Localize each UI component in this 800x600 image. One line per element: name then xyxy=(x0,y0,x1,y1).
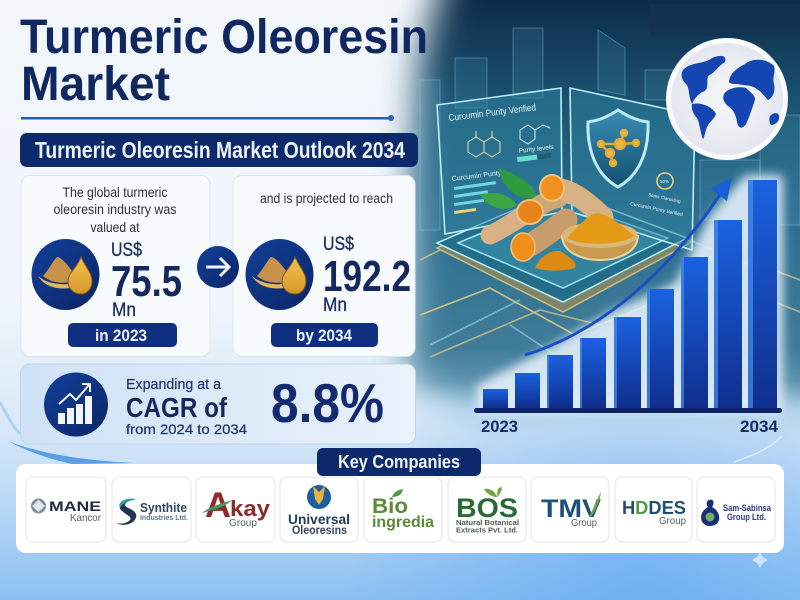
logo: Akay Group: Group xyxy=(229,518,257,529)
panel: key companies xyxy=(16,464,784,553)
title: Turmeric Oleoresin xyxy=(20,11,428,64)
value 8.8%: 8.8% xyxy=(271,372,384,434)
icon: green leaves xyxy=(480,168,537,209)
icon: sparkle xyxy=(752,552,768,568)
arrow: growth trend xyxy=(525,177,732,355)
year badge: in 2023 xyxy=(95,326,147,345)
logo: BOS: Extracts Pvt. Ltd. xyxy=(456,526,518,534)
company logo cards xyxy=(26,477,775,542)
logo: HDDES Group: HDDES xyxy=(622,498,686,518)
logo: Sam-Sabinsa: Sam-Sabinsa xyxy=(723,503,772,514)
icon: powder and oil drop xyxy=(32,239,100,310)
icon: turmeric powder bowl xyxy=(535,213,638,271)
panel progress bars xyxy=(454,153,551,214)
logo: Synthite xyxy=(116,499,188,525)
panel heading: Curcumin Purity Verified xyxy=(448,102,537,124)
logo: TMV Group xyxy=(541,492,601,529)
logo: Universal Oleoresins: Oleoresins xyxy=(292,525,347,537)
unit: Mn xyxy=(323,295,347,316)
icon: growth chart xyxy=(44,372,108,436)
decorative city skyline xyxy=(420,28,800,230)
currency label: US$ xyxy=(323,234,354,255)
panel: value in 2023 xyxy=(21,176,210,356)
logo: BOS: Natural Botanical xyxy=(456,518,519,527)
currency label: US$ xyxy=(111,240,142,261)
logo: Sam-Sabinsa: Group Ltd. xyxy=(727,512,766,523)
CAGR text: CAGR of xyxy=(126,392,228,423)
panel: value by 2034 xyxy=(233,176,415,356)
CAGR text xyxy=(126,376,247,437)
CAGR text: Expanding at a xyxy=(126,376,222,393)
logo: Synthite: Synthite xyxy=(140,500,187,515)
logo: Universal Oleoresins: Universal xyxy=(288,511,350,527)
icon: turmeric rhizomes xyxy=(490,175,603,261)
icon: shield with molecule xyxy=(588,110,648,187)
description text: valued at xyxy=(90,220,140,235)
holographic panel: verification: Curcumin Purity Verified xyxy=(630,201,684,218)
heading badge: key companies xyxy=(317,448,481,476)
description text: and is projected to reach xyxy=(260,191,393,206)
logo: Sam-Sabinsa xyxy=(701,500,772,526)
holographic panel: verification: Sams Clarusting xyxy=(648,192,682,204)
logo: Synthite: Industries Ltd. xyxy=(140,513,188,522)
logo: Universal Oleoresins xyxy=(288,485,350,537)
bar chart xyxy=(474,180,782,436)
heading banner: market outlook xyxy=(20,133,418,167)
logo: Akay Group xyxy=(202,486,271,529)
logo: Bio ingredia: Bio xyxy=(372,495,408,518)
CAGR text: from 2024 to 2034 xyxy=(126,421,247,437)
axis label 2023: 2023 xyxy=(481,417,518,436)
logo: MANE Kancor: MANE xyxy=(49,498,101,514)
holographic panel: curcumin purity xyxy=(437,88,562,234)
curcumin molecule diagram: Purity levels xyxy=(518,144,555,155)
logo: TMV Group: TMV xyxy=(541,495,601,523)
panel: CAGR xyxy=(20,364,416,444)
year badge xyxy=(271,323,378,347)
title xyxy=(20,11,428,111)
decorative wave xyxy=(0,402,782,464)
logo: HDDES Group: Group xyxy=(659,516,686,527)
curcumin molecule diagram xyxy=(451,125,555,183)
logo: HDDES Group xyxy=(622,498,686,527)
year badge: by 2034 xyxy=(296,326,352,345)
title underline xyxy=(21,115,394,121)
description text: oleoresin industry was xyxy=(54,202,177,217)
bar halo xyxy=(477,175,783,413)
logo: Bio ingredia: ingredia xyxy=(372,514,434,531)
logo: TMV Group: Group xyxy=(571,518,597,529)
logo: MANE Kancor xyxy=(31,498,101,524)
year badge xyxy=(68,323,177,347)
value 75.5: 75.5 xyxy=(111,257,182,306)
value 192.2: 192.2 xyxy=(323,252,411,301)
heading badge: key companies: Key Companies xyxy=(338,452,460,472)
icon: world globe xyxy=(666,38,788,160)
title: Market xyxy=(21,58,170,111)
description text: The global turmeric xyxy=(62,185,168,200)
holographic panel: verification xyxy=(570,88,695,250)
logo: BOS xyxy=(456,487,519,534)
icon: powder and oil drop xyxy=(246,239,314,310)
description text xyxy=(54,185,177,235)
arrow: between values xyxy=(197,246,239,288)
logo: MANE Kancor: Kancor xyxy=(70,512,101,524)
logo: BOS: BOS xyxy=(456,493,518,523)
curcumin molecule diagram: Curcumin Purity xyxy=(451,170,502,183)
heading banner: market outlook: Turmeric Oleoresin Market Outlook 2034 xyxy=(35,137,405,163)
logo: Akay Group: kay xyxy=(230,496,271,521)
logo: Bio ingredia xyxy=(372,489,434,531)
logo: Akay Group: A xyxy=(205,486,231,525)
glowing circuit floor xyxy=(420,240,800,365)
unit: Mn xyxy=(112,300,136,321)
glass tablet platform xyxy=(437,190,692,312)
axis label 2034: 2034 xyxy=(740,417,779,436)
holographic panel: verification: 50% xyxy=(660,179,669,184)
